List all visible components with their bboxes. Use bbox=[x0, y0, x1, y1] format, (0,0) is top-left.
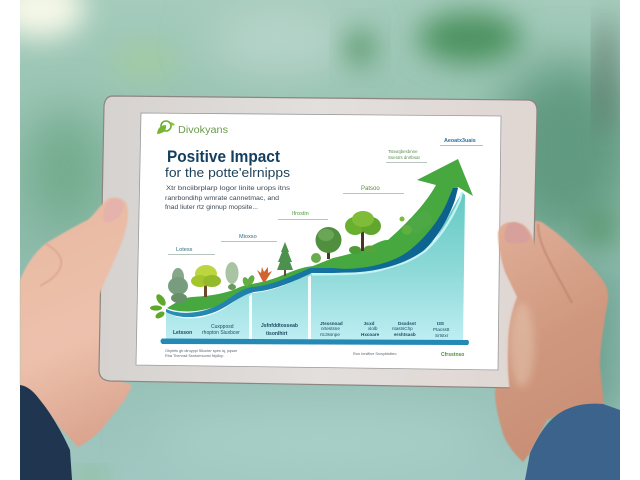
tablet bbox=[99, 96, 537, 388]
caption 6: ntastsChp bbox=[392, 326, 413, 331]
tree 3 bbox=[226, 262, 238, 290]
caption 4: Jtsssnoad bbox=[320, 321, 343, 326]
thumbnail bbox=[103, 199, 124, 223]
base bar bbox=[160, 338, 469, 345]
footer notes bbox=[165, 349, 237, 358]
caption 4: nrtestsne bbox=[321, 326, 340, 331]
label: stage 3 bbox=[278, 211, 328, 220]
logo bbox=[157, 121, 228, 136]
caption 6: ershtsasb bbox=[394, 332, 416, 337]
subtitle: for the potte'elrnipps bbox=[165, 166, 290, 180]
caption 5: xlolb bbox=[368, 326, 378, 331]
caption 7 bbox=[433, 321, 450, 338]
tablet body bbox=[99, 96, 537, 388]
right hand bbox=[495, 221, 608, 462]
caption 6 bbox=[392, 321, 416, 337]
caption 3: tisonlhirt bbox=[266, 331, 288, 337]
column dividers bbox=[249, 275, 311, 339]
label: stage 4: Patsoo bbox=[361, 186, 380, 192]
footer notes: Ohplets gb diruyppl Stlocter spes tq, pqsse bbox=[165, 349, 237, 353]
label: stage 6: Aeoatx3uais bbox=[444, 138, 476, 144]
finger crease shading bbox=[538, 224, 572, 303]
bush right bbox=[364, 246, 376, 252]
left sleeve bbox=[20, 385, 72, 480]
body text bbox=[165, 185, 290, 211]
footer notes: Rha Thennsil Ssntormoorsi frty8op bbox=[165, 354, 223, 358]
shrub bbox=[241, 274, 256, 288]
caption 4: rtc3ssnpe bbox=[320, 332, 340, 337]
trees bbox=[168, 211, 381, 303]
caption 2: rhopton Siuxbcer bbox=[202, 330, 240, 336]
label: stage 2 bbox=[221, 234, 277, 242]
footer centre note: Ron Inrsftlve Srxsybbdteo bbox=[353, 352, 396, 356]
title: Positive Impact bbox=[167, 148, 280, 166]
thumb shading bbox=[40, 244, 61, 286]
caption 7: I3S bbox=[437, 321, 444, 326]
caption 7: Srtstxr bbox=[435, 333, 449, 338]
caption 7: Ptacsstt bbox=[433, 327, 450, 332]
screen infographic bbox=[150, 121, 483, 358]
label: stage 2: Mioxso bbox=[239, 234, 257, 240]
tree 6 bbox=[345, 211, 381, 251]
right sleeve bbox=[525, 404, 620, 480]
small bush bbox=[311, 253, 321, 263]
label: stage 6 bbox=[440, 138, 483, 146]
label: stage 5 bbox=[386, 149, 427, 163]
caption 1: Letsson bbox=[173, 330, 192, 336]
column captions bbox=[173, 321, 450, 338]
palm highlight bbox=[510, 303, 534, 387]
red plant bbox=[257, 267, 272, 282]
body text: ranrbondihp wmrate cannetmac, and bbox=[165, 195, 280, 202]
label: stage 5: Ssestrs dnrtbsat bbox=[388, 155, 421, 160]
leaves near chart start bbox=[150, 293, 168, 320]
bush bbox=[349, 246, 361, 254]
blue curve band bbox=[166, 188, 458, 317]
caption 3 bbox=[261, 323, 298, 337]
icon: leaf logo bbox=[157, 121, 175, 134]
arrow foliage bbox=[400, 211, 432, 235]
label: stage 4 bbox=[343, 186, 404, 194]
label: stage 1: Lotess bbox=[176, 247, 193, 253]
tree 1 bbox=[168, 268, 188, 303]
teal area chart bbox=[166, 192, 465, 340]
footer logo: Cfrsstnso bbox=[441, 352, 464, 358]
tree 5 bbox=[316, 227, 342, 259]
left thumb bbox=[40, 197, 128, 305]
pale curve highlight bbox=[312, 192, 462, 274]
label: stage 3: Ifrostin bbox=[292, 211, 309, 217]
logo wordmark: Divokyans bbox=[178, 125, 228, 136]
thumbnail bbox=[505, 222, 530, 244]
caption 5: Hxcoare bbox=[361, 332, 380, 337]
caption 2 bbox=[202, 324, 240, 336]
body text: fnad liuter rtz ginnup mopsite... bbox=[165, 204, 258, 211]
tablet screen bbox=[136, 113, 501, 370]
caption 5 bbox=[361, 321, 380, 337]
label: stage 5: Tsteatjbesbnne bbox=[388, 149, 418, 154]
tree 4 bbox=[277, 242, 293, 276]
right thumb and palm bbox=[498, 222, 575, 410]
caption 4 bbox=[320, 321, 343, 337]
milestone labels bbox=[168, 138, 483, 255]
caption 6: Dsxdsst bbox=[398, 321, 416, 326]
caption 5: 3cxd bbox=[364, 321, 375, 326]
label: stage 1 bbox=[168, 247, 215, 255]
green hill and arrow bbox=[167, 159, 473, 311]
caption 2: Cuxpposd bbox=[211, 324, 234, 330]
tree 2 bbox=[191, 265, 221, 297]
left hand bbox=[20, 214, 132, 447]
caption 3: Jsfnfddtosseab bbox=[261, 323, 298, 329]
body text: Xtr bnciibrplarp logor linite urops itns bbox=[166, 185, 290, 192]
